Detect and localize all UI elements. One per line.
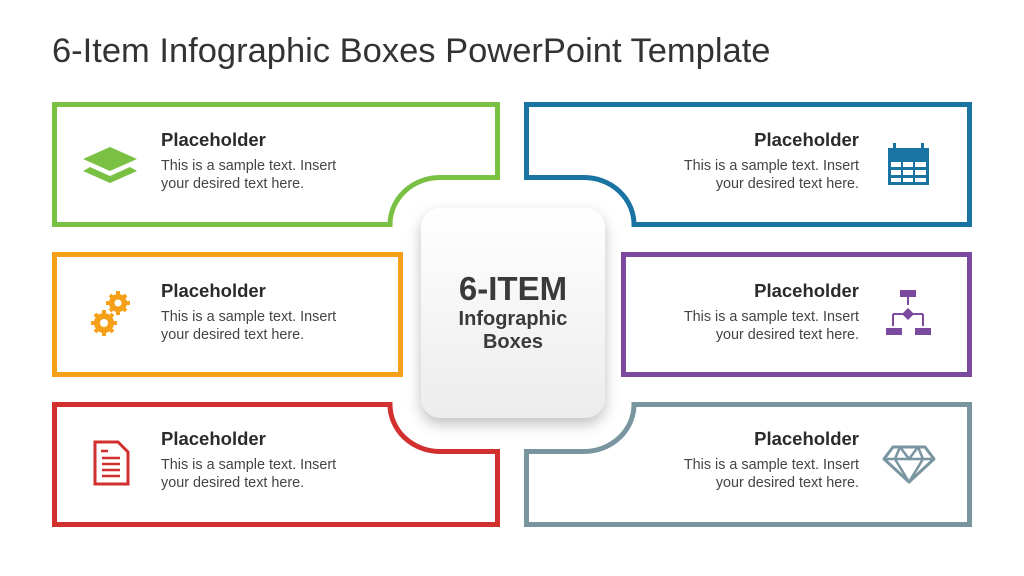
text: box 1: your desired text here. bbox=[161, 176, 304, 192]
text: box 4: your desired text here. bbox=[716, 176, 859, 192]
text: box 5: your desired text here. bbox=[716, 327, 859, 343]
center text bbox=[459, 270, 567, 353]
text: box 1 bbox=[161, 129, 336, 192]
icon: gears bbox=[91, 291, 130, 336]
text: box 4 bbox=[684, 129, 859, 192]
icon: document bbox=[95, 442, 128, 484]
text: box 5: Placeholder bbox=[754, 280, 859, 301]
text: box 4: This is a sample text. Insert bbox=[684, 158, 859, 174]
text: box 1: This is a sample text. Insert bbox=[161, 158, 336, 174]
text: box 3: Placeholder bbox=[161, 428, 266, 449]
center text: Infographic bbox=[459, 308, 567, 330]
icon: diamond bbox=[884, 447, 934, 482]
text: box 5 bbox=[684, 280, 859, 343]
center text: Boxes bbox=[483, 331, 543, 353]
panel: green bbox=[54, 104, 498, 224]
panel: blue bbox=[526, 104, 970, 224]
text: box 2: your desired text here. bbox=[161, 327, 304, 343]
panel: grey bbox=[526, 404, 970, 524]
icon: flowchart bbox=[886, 290, 931, 335]
text: box 6: This is a sample text. Insert bbox=[684, 457, 859, 473]
center card bbox=[421, 208, 605, 418]
icon: layers bbox=[83, 147, 137, 183]
text: box 4: Placeholder bbox=[754, 129, 859, 150]
panel: orange bbox=[54, 254, 400, 374]
text: box 2: Placeholder bbox=[161, 280, 266, 301]
icon: calendar bbox=[888, 143, 929, 185]
text: box 3 bbox=[161, 428, 336, 491]
text: box 3: your desired text here. bbox=[161, 475, 304, 491]
panel: red bbox=[54, 404, 498, 524]
text: box 2: This is a sample text. Insert bbox=[161, 309, 336, 325]
text: box 6: your desired text here. bbox=[716, 475, 859, 491]
panel: purple bbox=[624, 254, 970, 374]
text: box 5: This is a sample text. Insert bbox=[684, 309, 859, 325]
text: box 3: This is a sample text. Insert bbox=[161, 457, 336, 473]
center text: 6-ITEM bbox=[459, 270, 567, 307]
text: box 1: Placeholder bbox=[161, 129, 266, 150]
text: box 2 bbox=[161, 280, 336, 343]
title: 6-Item Infographic Boxes PowerPoint Template bbox=[52, 32, 770, 70]
text: box 6: Placeholder bbox=[754, 428, 859, 449]
text: box 6 bbox=[684, 428, 859, 491]
